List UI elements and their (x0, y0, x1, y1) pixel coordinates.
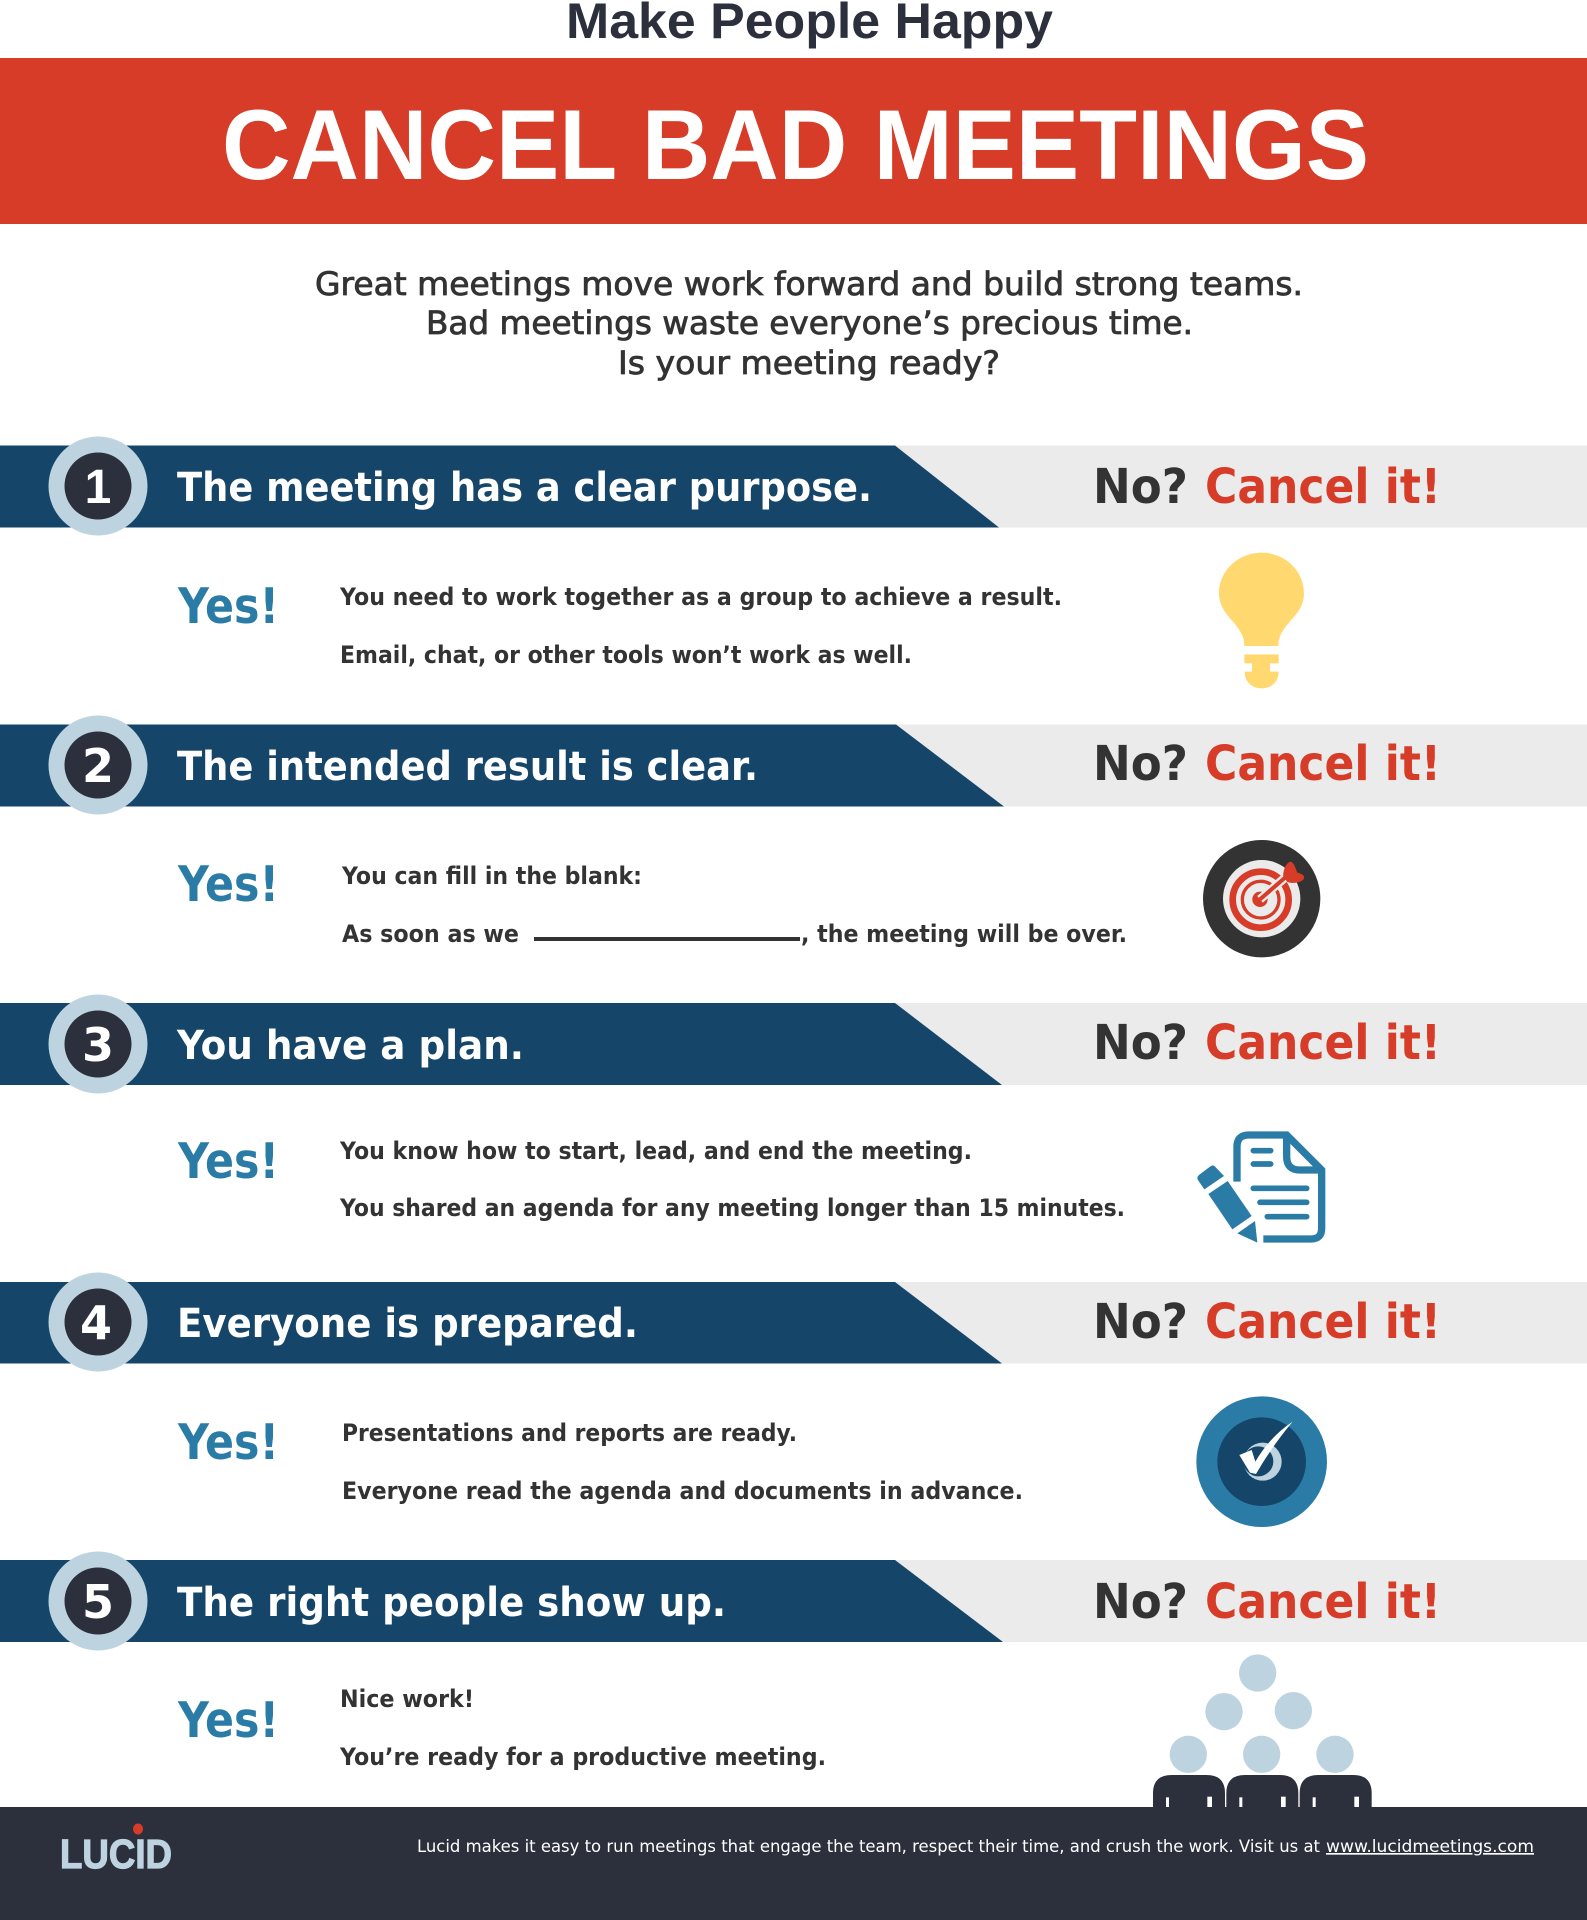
step 3 details: You know how to start, lead, and end the meeting. (339, 1137, 972, 1165)
step 3 yes label: Yes! (177, 1133, 279, 1190)
step 1 details: Email, chat, or other tools won’t work as well. (340, 641, 912, 669)
step 1 header bar: The meeting has a clear purpose. (177, 465, 872, 511)
step 3 header bar: No? (1093, 1015, 1188, 1071)
banner: Cancel Bad Meetings (0, 58, 1587, 224)
step 2 details (341, 862, 1127, 948)
step 1 details (339, 583, 1062, 669)
step 4 header bar (0, 1272, 1587, 1372)
step 1 header bar: Cancel it! (1205, 459, 1441, 515)
panel: step 5 (0, 1552, 1587, 1808)
step 2 header bar (0, 716, 1587, 814)
step 2 details: , the meeting will be over. (801, 920, 1127, 948)
step 4 details: Everyone read the agenda and documents in advance. (342, 1477, 1023, 1505)
intro text: Is your meeting ready? (618, 344, 1000, 382)
step 2 yes label: Yes! (177, 856, 279, 913)
step 1 header bar: 1 (85, 461, 111, 514)
step 4 yes label: Yes! (177, 1414, 279, 1471)
step 2 header bar: No? (1093, 736, 1188, 792)
step 3 details (339, 1137, 1125, 1222)
step 4 header bar: Everyone is prepared. (177, 1301, 638, 1347)
step 5 header bar: Cancel it! (1205, 1574, 1441, 1630)
panel: step 4 (0, 1272, 1587, 1527)
icon: light bulb (1219, 553, 1304, 688)
intro text: Great meetings move work forward and build strong teams. (315, 265, 1303, 303)
logo: Lucid: LUCID (60, 1831, 172, 1877)
step 1 header bar: No? (1093, 459, 1188, 515)
icon: target (1203, 840, 1320, 957)
panel: step 2 (0, 716, 1587, 957)
step 2 details: As soon as we (342, 920, 519, 948)
step 4 details (342, 1419, 1023, 1505)
panel: step 3 (0, 994, 1587, 1243)
footer text: www.lucidmeetings.com (1326, 1837, 1534, 1856)
step 5 details: You’re ready for a productive meeting. (339, 1743, 826, 1771)
step 4 header bar: Cancel it! (1205, 1294, 1441, 1350)
step 3 details: You shared an agenda for any meeting longer than 15 minutes. (339, 1194, 1125, 1222)
step 5 details (339, 1685, 826, 1771)
step 3 header bar: Cancel it! (1205, 1015, 1441, 1071)
step 1 details: You need to work together as a group to achieve a result. (339, 583, 1062, 611)
step 5 details: Nice work! (340, 1685, 474, 1713)
step 4 header bar: 4 (80, 1296, 112, 1350)
step 1 yes label: Yes! (177, 578, 279, 635)
step 5 header bar: No? (1093, 1574, 1188, 1630)
step 2 details: You can fill in the blank: (341, 862, 642, 890)
step 5 header bar (0, 1552, 1587, 1650)
step 5 yes label: Yes! (177, 1692, 279, 1749)
icon: document and pencil (1197, 1135, 1322, 1243)
intro text (315, 265, 1303, 382)
step 2 header bar: The intended result is clear. (177, 744, 758, 790)
footer (0, 1807, 1587, 1920)
panel: step 1 (0, 436, 1587, 688)
step 5 header bar: The right people show up. (177, 1580, 726, 1626)
icon: check mark badge (1196, 1396, 1327, 1527)
step 2 header bar: Cancel it! (1205, 736, 1441, 792)
step 4 details: Presentations and reports are ready. (342, 1419, 797, 1447)
footer text: Lucid makes it easy to run meetings that engage the team, respect their time, and crush the work. Visit us at (417, 1837, 1321, 1856)
step 1 header bar (0, 436, 1587, 536)
step 3 header bar (0, 994, 1587, 1094)
step 3 header bar: 3 (82, 1018, 114, 1072)
step 3 header bar: You have a plan. (176, 1023, 524, 1069)
banner: Cancel Bad Meetings: CANCEL BAD MEETINGS (222, 89, 1369, 200)
step 2 header bar: 2 (82, 739, 114, 793)
step 5 header bar: 5 (82, 1575, 114, 1629)
icon: group of people (1153, 1654, 1372, 1808)
intro text: Bad meetings waste everyone’s precious time. (426, 304, 1193, 342)
step 4 header bar: No? (1093, 1294, 1188, 1350)
